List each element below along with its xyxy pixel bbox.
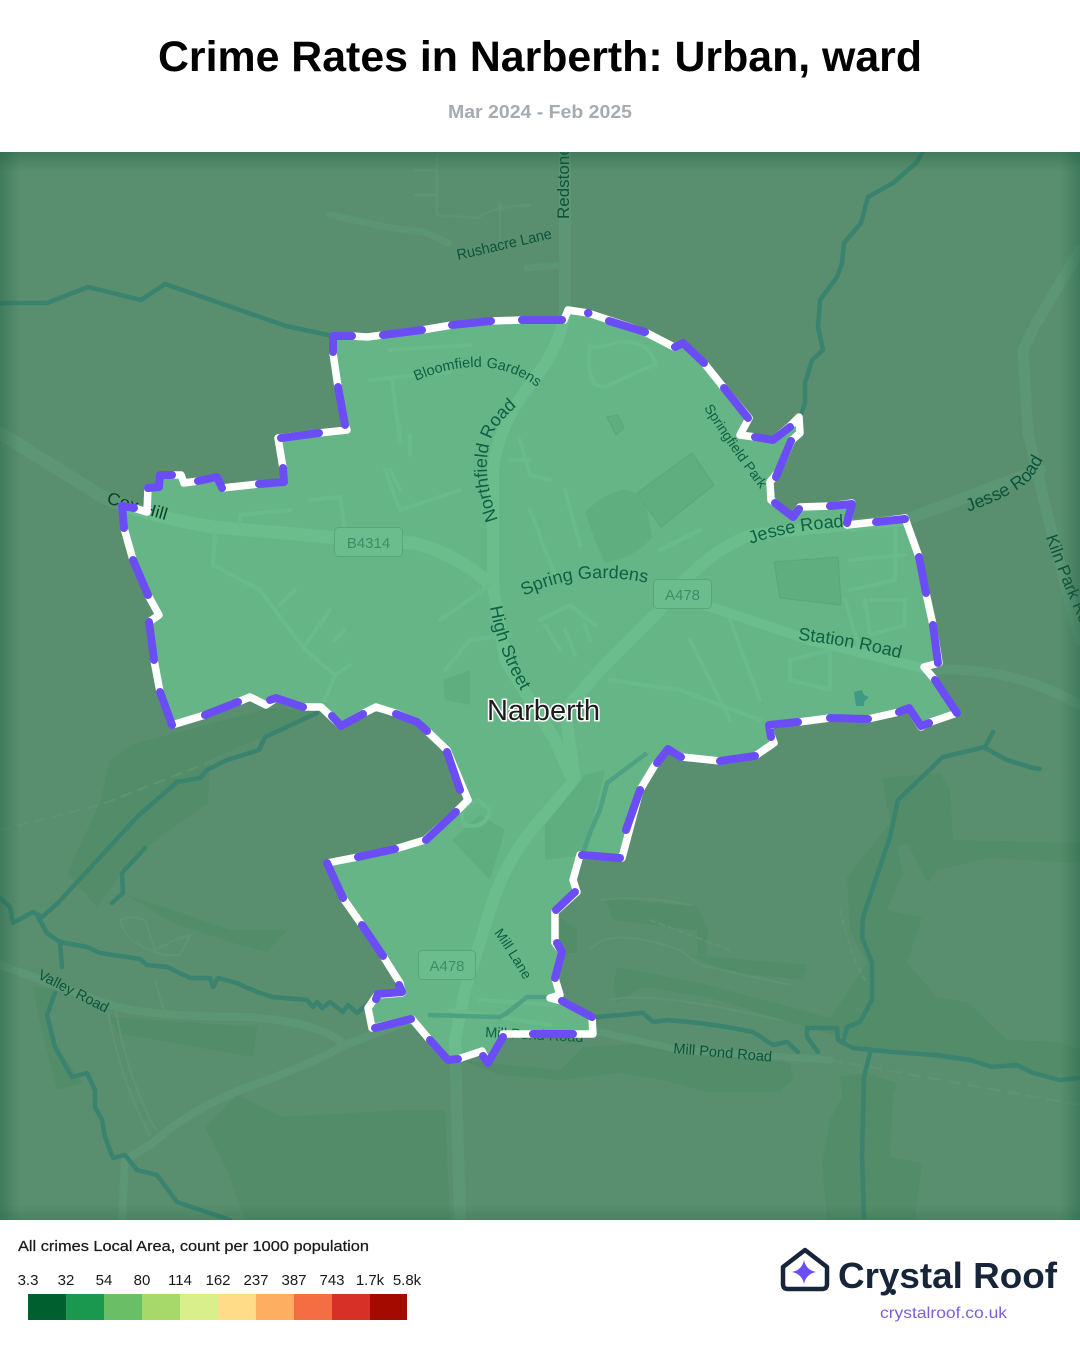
road shield: B4314 bbox=[334, 528, 402, 556]
legend scale values: 114 bbox=[168, 1272, 192, 1289]
road shield: A478 east bbox=[654, 580, 712, 608]
brand name: Crystal Roof bbox=[838, 1255, 1058, 1296]
road shield: B4314: B4314 bbox=[347, 535, 390, 552]
road label: Springfield Park: Springfield Park bbox=[705, 404, 766, 489]
road label: Northfield Road: Northfield Road bbox=[474, 398, 516, 522]
place label: Narberth: Narberth bbox=[487, 695, 600, 727]
legend scale values: 743 bbox=[319, 1272, 345, 1289]
legend scale values: 162 bbox=[205, 1272, 231, 1289]
legend scale values: 54 bbox=[96, 1272, 112, 1289]
rivers bbox=[0, 152, 1080, 1220]
road label: Cox Hill: Cox Hill bbox=[105, 489, 170, 524]
ward area fill bbox=[126, 314, 951, 1056]
legend scale values: 1.7k bbox=[356, 1272, 385, 1289]
woodland patches bbox=[33, 708, 1080, 1220]
shaded grounds inside ward bbox=[561, 414, 842, 805]
legend colour bar bbox=[28, 1294, 407, 1320]
brand url: crystalroof.co.uk bbox=[880, 1305, 1008, 1322]
legend scale values bbox=[18, 1272, 422, 1289]
roads outside ward bbox=[236, 1043, 756, 1096]
small teal building bbox=[854, 690, 869, 706]
legend title: All crimes Local Area, count per 1000 population bbox=[18, 1238, 369, 1255]
road label: Mill Pond Road inside: Mill Pond Road bbox=[485, 1025, 584, 1046]
legend scale values: 5.8k bbox=[393, 1272, 422, 1289]
road label: Mill Lane: Mill Lane bbox=[494, 928, 530, 979]
road label: Valley Road: Valley Road bbox=[35, 967, 111, 1017]
legend scale values: 387 bbox=[281, 1272, 307, 1289]
road label: Jesse Road outer: Jesse Road bbox=[967, 454, 1042, 511]
road label: Station Road: Station Road bbox=[799, 628, 902, 658]
road shield: A478 south: A478 bbox=[429, 958, 465, 975]
road label: Redstone Road: Redstone Road bbox=[554, 101, 573, 219]
roads inside ward bbox=[0, 152, 1080, 1220]
road label: Jesse Road inner: Jesse Road bbox=[750, 514, 842, 544]
legend scale values: 80 bbox=[134, 1272, 150, 1289]
road shield: A478 south bbox=[418, 950, 476, 980]
road label: Rushacre Lane: Rushacre Lane bbox=[455, 226, 553, 264]
title: Crime Rates in Narberth: Urban, ward bbox=[158, 33, 922, 81]
road label: High Street: High Street bbox=[490, 606, 530, 691]
road shield: A478 east: A478 bbox=[665, 587, 700, 604]
ward boundary bbox=[122, 310, 957, 1063]
road label: Bloomfield Gardens: Bloomfield Gardens bbox=[413, 356, 540, 386]
road label: Mill Pond Road outside: Mill Pond Road bbox=[673, 1041, 773, 1066]
legend scale values: 237 bbox=[243, 1272, 269, 1289]
icon: keyhole on brand y bbox=[890, 1289, 896, 1295]
road label: Spring Gardens: Spring Gardens bbox=[521, 565, 648, 594]
map edge vignette bbox=[0, 152, 1080, 1220]
minor streets inside ward bbox=[466, 818, 488, 828]
icon: crystal roof house logo bbox=[783, 1250, 827, 1289]
legend scale values: 3.3 bbox=[18, 1272, 38, 1289]
legend scale values: 32 bbox=[58, 1272, 74, 1289]
date range subtitle: Mar 2024 - Feb 2025 bbox=[448, 102, 632, 122]
minor streets outside ward bbox=[104, 762, 870, 1034]
